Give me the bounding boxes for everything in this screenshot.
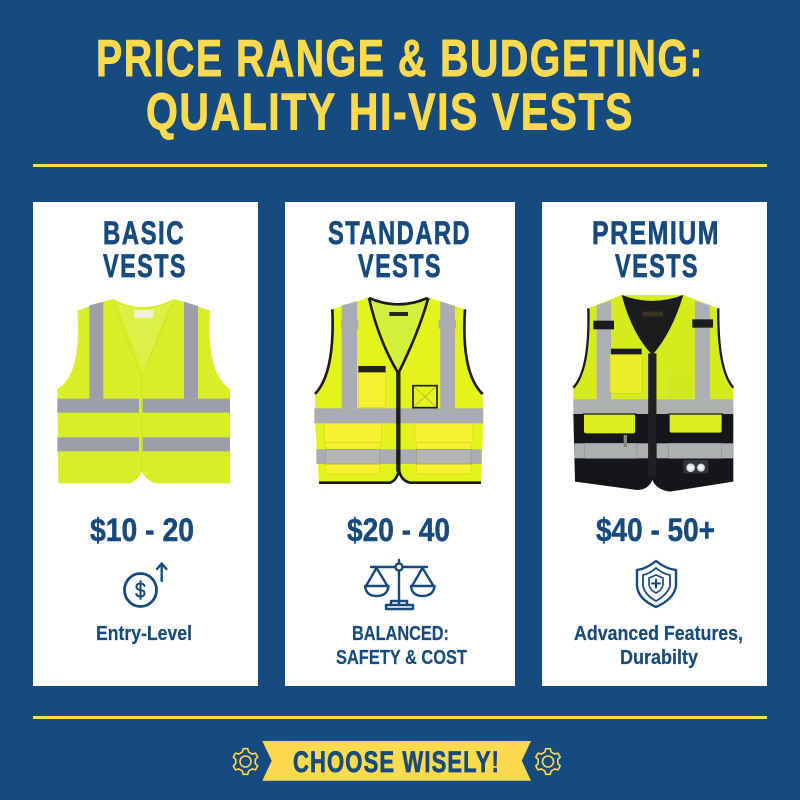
heading: basic vests: BASIC — [103, 215, 185, 251]
label: advanced features, durability: Durabilty — [620, 647, 699, 669]
icon: balance scale — [365, 560, 434, 609]
heading: premium vests: PREMIUM — [592, 215, 720, 251]
icon: shield with plus — [637, 561, 676, 607]
title — [96, 30, 704, 142]
heading: basic vests: VESTS — [103, 248, 187, 284]
vest: basic mesh — [57, 299, 230, 483]
heading: standard vests — [328, 215, 471, 284]
title: QUALITY HI-VIS VESTS — [146, 84, 634, 142]
icon: coin with up arrow — [124, 564, 166, 606]
banner: choose wisely — [262, 741, 531, 781]
label: balanced safety and cost: SAFETY & COST — [336, 647, 467, 669]
heading: basic vests — [103, 215, 187, 284]
vest: premium black and yellow — [573, 295, 733, 492]
label: balanced safety and cost — [336, 623, 467, 669]
heading: standard vests: VESTS — [358, 248, 442, 284]
price: premium: $40 - 50+ — [596, 512, 715, 548]
panel: standard vests — [285, 202, 515, 686]
panel: basic vests — [33, 202, 258, 686]
heading: premium vests: VESTS — [615, 248, 699, 284]
vest: standard with pockets and zipper — [314, 297, 483, 483]
price: basic: $10 - 20 — [90, 512, 194, 548]
heading: standard vests: STANDARD — [328, 215, 471, 251]
label: advanced features, durability — [574, 623, 743, 669]
label: advanced features, durability: Advanced Features, — [574, 623, 743, 645]
icon: left gear — [233, 749, 258, 774]
banner: choose wisely: CHOOSE WISELY! — [293, 746, 500, 779]
panel: premium vests — [542, 202, 767, 686]
icon: right gear — [536, 749, 560, 774]
heading: premium vests — [592, 215, 720, 284]
label: entry-level: Entry-Level — [96, 623, 192, 645]
price: standard: $20 - 40 — [347, 512, 450, 548]
label: balanced safety and cost: BALANCED: — [352, 623, 449, 645]
